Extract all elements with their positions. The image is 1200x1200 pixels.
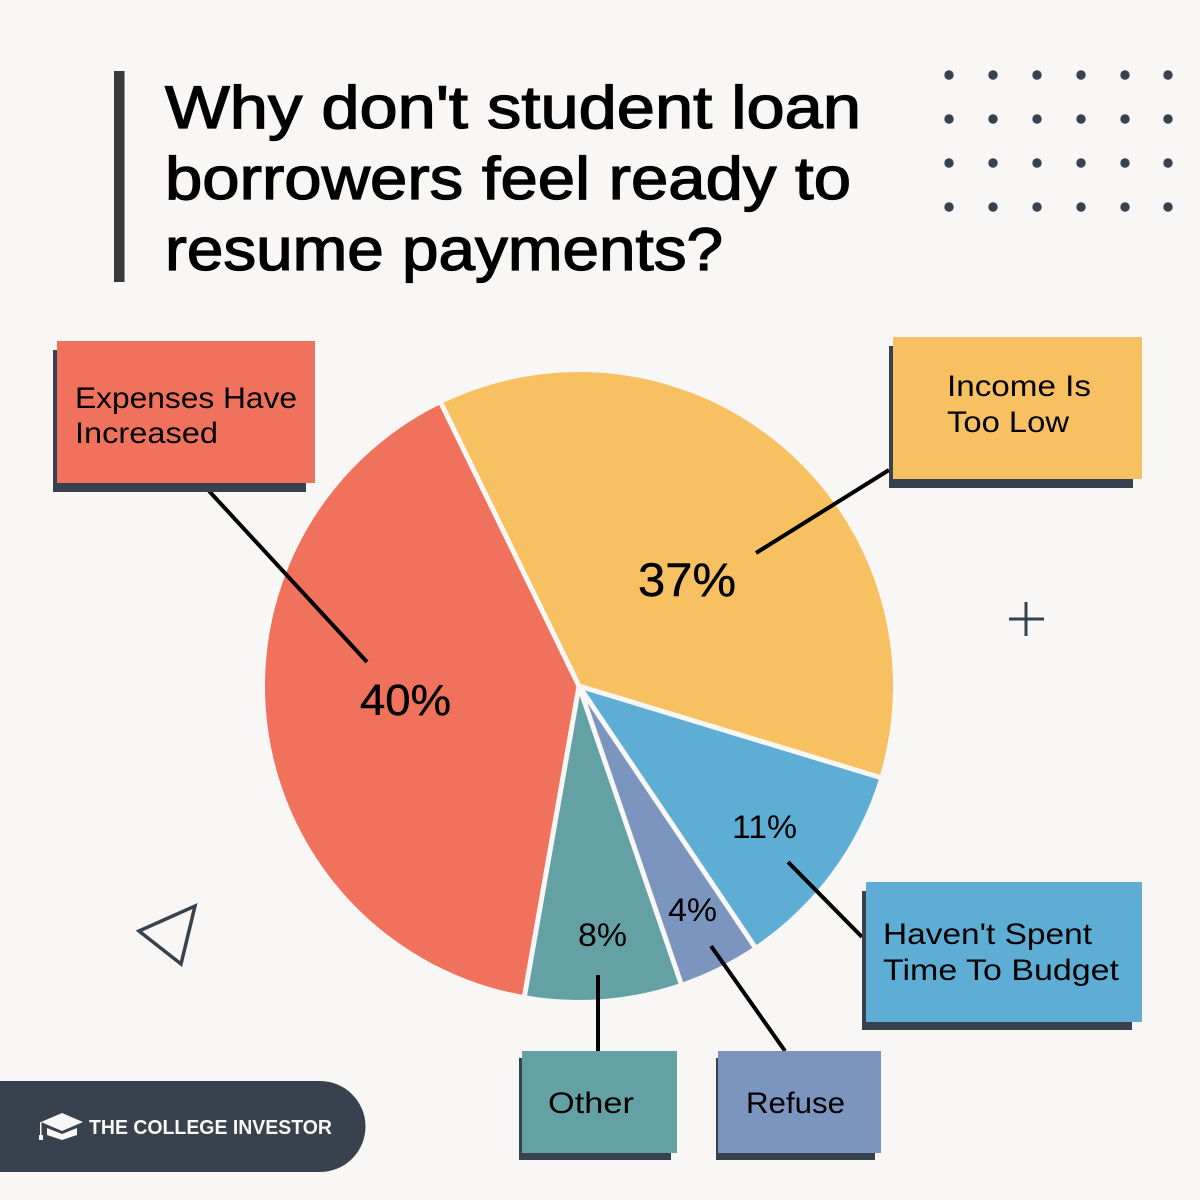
callout: expenses have increased: Increased	[75, 417, 218, 450]
callout: income is too low: Income Is	[947, 370, 1091, 403]
title accent bar	[114, 71, 124, 282]
title: Why don't student loan	[165, 74, 861, 141]
slice: income is too low 37%	[441, 372, 893, 777]
slice: refuse 4%	[579, 686, 754, 983]
value: 40%: 40%	[360, 676, 451, 725]
icon: plus sign	[1009, 602, 1044, 636]
leader line: other	[596, 975, 600, 1051]
callout: haven't spent time to budget	[862, 882, 1142, 1030]
slice: haven't spent time to budget 11%	[579, 686, 880, 946]
slice: other 8%	[525, 686, 681, 1000]
callout: refuse: Refuse	[746, 1087, 845, 1120]
callout: expenses have increased	[53, 341, 315, 492]
pie chart	[265, 372, 893, 1000]
title	[165, 74, 861, 283]
value: 11%: 11%	[732, 809, 797, 845]
callout: expenses have increased: Expenses Have	[75, 382, 297, 415]
icon: graduation cap	[39, 1113, 83, 1140]
callout: haven't spent time to budget: Time To Budget	[883, 954, 1120, 987]
leader line: budget	[788, 862, 862, 937]
footer brand banner	[0, 1081, 365, 1172]
callout: other: Other	[548, 1087, 634, 1120]
callout: income is too low: Too Low	[947, 406, 1069, 439]
brand name: THE COLLEGE INVESTOR	[89, 1117, 333, 1139]
leader line: income	[756, 470, 889, 553]
value: 8%: 8%	[578, 917, 627, 953]
title: borrowers feel ready to	[165, 145, 851, 212]
callout: refuse	[716, 1051, 881, 1160]
title: resume payments?	[165, 216, 723, 283]
leader line: refuse	[711, 946, 785, 1051]
value: 4%: 4%	[668, 892, 717, 928]
leader line: expenses	[209, 491, 367, 662]
slice: expenses have increased 40%	[265, 404, 579, 995]
callout: haven't spent time to budget: Haven't Spent	[883, 918, 1093, 951]
callout: other	[519, 1051, 677, 1160]
decorative dot grid	[944, 70, 1173, 212]
icon: triangle outline	[139, 906, 195, 964]
callout: income is too low	[889, 337, 1142, 488]
value: 37%: 37%	[638, 553, 736, 606]
